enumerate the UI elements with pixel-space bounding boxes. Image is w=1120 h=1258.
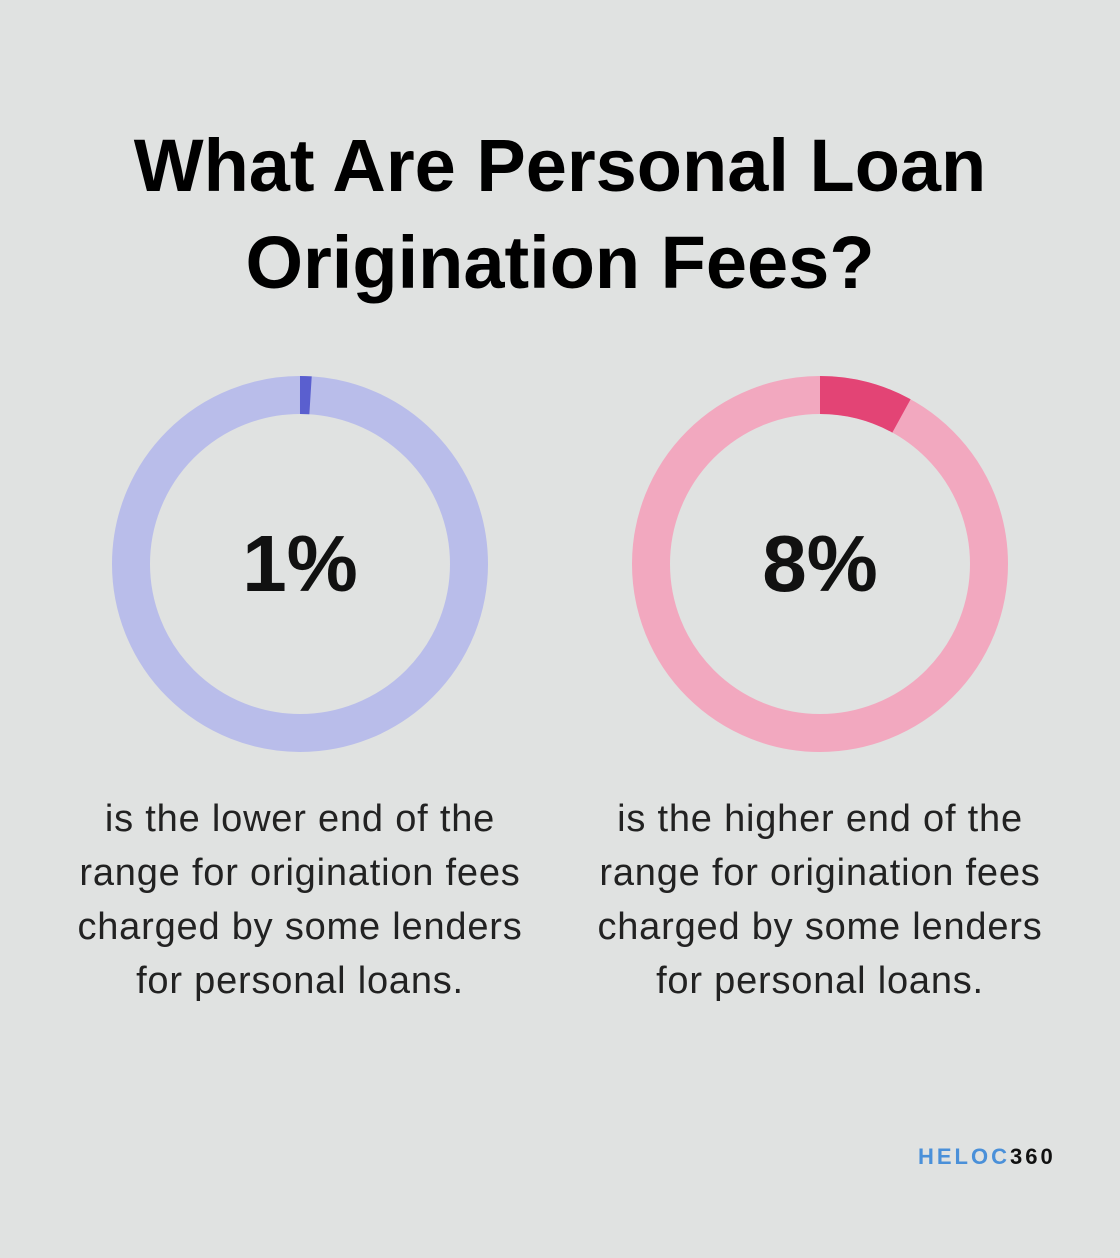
- text: higher end: range for origination fees: [599, 852, 1041, 894]
- donut: 8%: 8%: [762, 519, 878, 608]
- text: lower end: charged by some lenders: [77, 906, 523, 948]
- text: lower end: for personal loans.: [136, 960, 464, 1002]
- donut: 1%: [112, 376, 488, 752]
- logo: HELOC360: [918, 1144, 1056, 1169]
- text: lower end: is the lower end of the: [105, 798, 495, 840]
- text: lower end: [77, 798, 523, 1002]
- text: higher end: [597, 798, 1043, 1002]
- title: Origination Fees?: [245, 221, 875, 304]
- donut: 1%: 1%: [242, 519, 358, 608]
- text: higher end: for personal loans.: [656, 960, 984, 1002]
- title: What Are Personal Loan: [134, 124, 986, 207]
- title: [134, 124, 986, 304]
- text: lower end: range for origination fees: [79, 852, 521, 894]
- text: higher end: charged by some lenders: [597, 906, 1043, 948]
- text: higher end: is the higher end of the: [617, 798, 1023, 840]
- donut: 8%: [632, 376, 1008, 752]
